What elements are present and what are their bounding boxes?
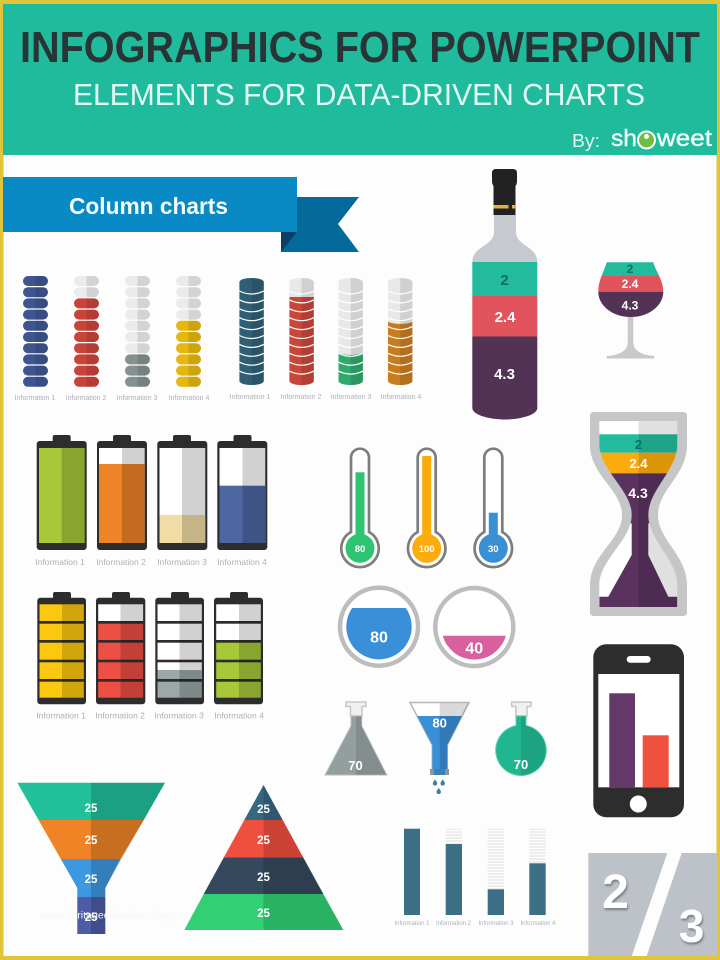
glass values: 2: [627, 262, 634, 276]
funnel values: [85, 803, 98, 924]
funnel values: 25: [85, 835, 98, 847]
bottle foil: [492, 169, 517, 215]
pyramid values: [257, 804, 270, 920]
lab funnel: [410, 702, 469, 794]
round gauge 80: 80: [370, 630, 388, 646]
pyramid values: 25: [257, 835, 270, 847]
cylinder 2: Information 2: [281, 394, 322, 401]
byline: By:: [572, 131, 600, 151]
thermometer 80: [341, 449, 379, 567]
pyramid values: 25: [257, 872, 270, 884]
funnel values: 25: [85, 912, 98, 924]
hourglass frame: [590, 412, 687, 616]
glass values: 4.3: [622, 298, 639, 312]
bar 3: Information 3: [478, 921, 514, 927]
conical flask: 70: [348, 758, 363, 773]
round gauge 40: 40: [465, 640, 483, 658]
chart: pill columns: [15, 276, 210, 402]
lab funnel: 80: [432, 716, 447, 730]
number 2: 2: [602, 866, 629, 919]
segmented battery 2: [95, 592, 145, 720]
wine glass chart: [595, 262, 667, 358]
pill column 1: [15, 276, 56, 402]
bar 1: [394, 829, 430, 927]
wine bottle chart: [472, 169, 537, 420]
round flask: 70: [514, 757, 528, 772]
smartphone chart: [593, 644, 684, 817]
glass bowl layers: [598, 262, 664, 317]
round gauge 80: [340, 588, 418, 666]
bottle layer: 2: 2: [500, 272, 509, 289]
segmented battery 3: Information 3: [154, 710, 204, 720]
segmented battery 4: [214, 592, 264, 720]
thermometer 100: [408, 449, 445, 567]
bar 2: [436, 829, 472, 927]
section ribbon: column charts: [3, 177, 359, 252]
segmented battery 1: [36, 592, 86, 720]
header band: [3, 4, 717, 155]
page number tag: [588, 853, 717, 956]
pill column 2: Information 2: [66, 395, 107, 402]
pyramid layer green: [184, 894, 343, 930]
bar 4: [520, 829, 556, 927]
cylinder 3: Information 3: [331, 394, 372, 401]
hourglass values: 2: [635, 437, 642, 452]
glass values: [622, 262, 639, 312]
bottle neck and shoulder: [472, 215, 537, 262]
battery 4: Information 4: [217, 557, 267, 567]
ribbon label: Column charts: [69, 193, 228, 219]
funnel values: 25: [85, 874, 98, 886]
battery 3: [157, 435, 207, 567]
logo: weet: [656, 125, 713, 151]
segmented battery 1: Information 1: [36, 710, 86, 720]
conical flask: [325, 702, 387, 775]
bar 1: Information 1: [394, 921, 430, 927]
segmented battery 3: [154, 592, 204, 720]
pill column 1: Information 1: [15, 395, 56, 402]
thermometer 80: 80: [355, 544, 365, 555]
bar 2: Information 2: [436, 921, 472, 927]
thermometer 30: 30: [488, 544, 499, 555]
bottle layer: 4.3: [472, 336, 537, 420]
cylinder 1: [230, 278, 271, 401]
watermark: www.heritagechristiancollege.com: [39, 910, 200, 922]
cylinder 4: [381, 278, 422, 401]
pill column 3: [117, 276, 158, 402]
bottle layer: 4.3: 4.3: [494, 366, 515, 383]
thermometers: [341, 449, 512, 567]
chart: batteries row 1: [35, 435, 267, 567]
chart: striped column bars: [394, 829, 556, 927]
bar 4: Information 4: [520, 921, 556, 927]
funnel chart: [17, 783, 165, 934]
bottle layer: 2.4: 2.4: [495, 309, 516, 326]
logo: [611, 125, 713, 151]
bottle layer: 2.4: [472, 296, 537, 336]
hourglass values: 2.4: [629, 456, 648, 471]
phone bar purple: [609, 693, 635, 787]
thermometer 30: [475, 449, 512, 567]
funnel layer orange: [39, 820, 144, 859]
hourglass values: [628, 437, 648, 501]
funnel values: 25: [85, 803, 98, 815]
battery 3: Information 3: [157, 557, 207, 567]
phone bar red: [643, 735, 669, 787]
pyramid values: 25: [257, 804, 270, 816]
pyramid chart: [184, 785, 343, 930]
chart: cylinder columns: [230, 278, 422, 401]
pyramid layer red: [224, 820, 303, 857]
battery 4: [217, 435, 267, 567]
pyramid layer navy: [204, 857, 323, 894]
round gauge 40: [435, 588, 513, 666]
glass values: 2.4: [622, 277, 639, 291]
subtitle: ELEMENTS FOR DATA-DRIVEN CHARTS: [73, 77, 645, 112]
pill column 3: Information 3: [117, 395, 158, 402]
bar 3: [478, 829, 514, 927]
bottle layer: 2: [472, 262, 537, 296]
pill column 2: [66, 276, 107, 402]
segmented battery 4: Information 4: [214, 710, 264, 720]
battery 2: [96, 435, 147, 567]
funnel layer teal: [17, 783, 165, 820]
round flask: [496, 702, 546, 776]
battery 1: [35, 435, 87, 567]
hourglass chart: [590, 412, 687, 616]
pill column 4: [169, 276, 210, 402]
battery 1: Information 1: [35, 557, 85, 567]
thermometer 100: 100: [419, 544, 435, 555]
pyramid layer teal: [244, 785, 283, 820]
chart: segmented batteries row 2: [36, 592, 264, 720]
segmented battery 2: Information 2: [95, 710, 145, 720]
battery 2: Information 2: [96, 557, 146, 567]
funnel layer blue: [61, 859, 120, 897]
number 3: 3: [679, 900, 704, 952]
glass stem: [607, 316, 654, 358]
hourglass contents: [599, 421, 678, 608]
cylinder 4: Information 4: [381, 394, 422, 401]
logo: sh: [611, 125, 637, 151]
pill column 4: Information 4: [169, 395, 210, 402]
cylinder 2: [281, 278, 322, 401]
pyramid values: 25: [257, 908, 270, 920]
hourglass values: 4.3: [628, 485, 648, 501]
cylinder 1: Information 1: [230, 394, 271, 401]
cylinder 3: [331, 278, 372, 401]
funnel layer indigo: [77, 897, 105, 934]
drops: [433, 780, 445, 794]
